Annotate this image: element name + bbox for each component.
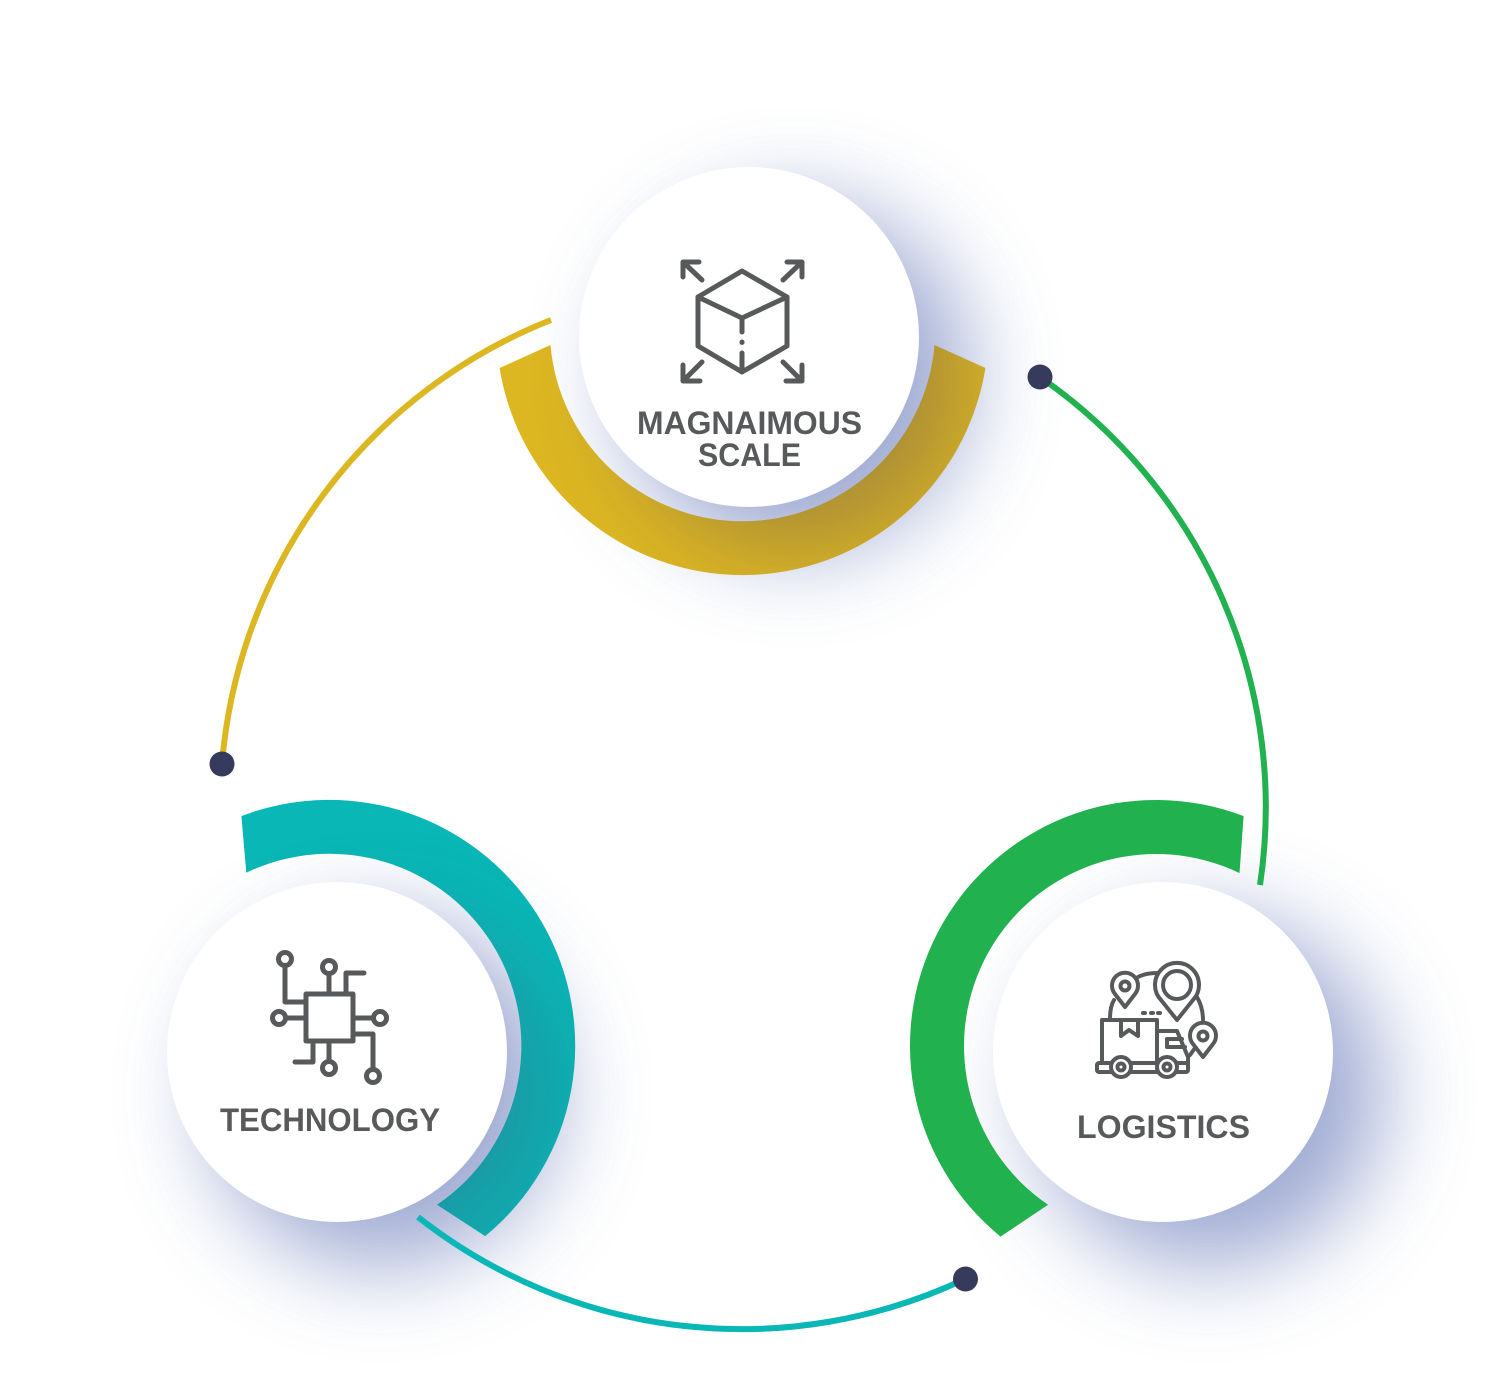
shade on gold ring xyxy=(594,345,986,575)
icon: delivery truck with map pins xyxy=(1097,963,1216,1077)
connector arc: teal xyxy=(418,1217,965,1329)
dot: teal arc end xyxy=(953,1266,978,1292)
connector arc: gold xyxy=(222,320,551,764)
icon: circuit chip xyxy=(272,952,386,1082)
ring segment: green xyxy=(910,800,1244,1237)
shadow: logistics circle xyxy=(1033,917,1383,1267)
shadow: technology circle xyxy=(207,917,557,1267)
dot: gold arc end xyxy=(210,752,234,776)
dot: green arc end xyxy=(1028,364,1052,390)
ring segment: teal xyxy=(241,800,575,1236)
ring segment: gold xyxy=(500,345,985,575)
heading: technology: TECHNOLOGY xyxy=(220,1102,440,1138)
heading: magnaimous scale: MAGNAIMOUS xyxy=(637,405,862,441)
heading: magnaimous scale xyxy=(637,405,862,473)
heading: logistics: LOGISTICS xyxy=(1077,1109,1250,1145)
circle: technology xyxy=(167,882,507,1222)
shade on teal ring xyxy=(437,909,575,1236)
connector arc: green xyxy=(1040,377,1266,885)
heading: magnaimous scale: SCALE xyxy=(698,437,801,473)
shadow: magnaimous scale circle xyxy=(619,202,969,552)
circle: magnaimous scale xyxy=(579,167,919,507)
circle: logistics xyxy=(993,882,1333,1222)
icon: expanding cube xyxy=(683,262,802,381)
